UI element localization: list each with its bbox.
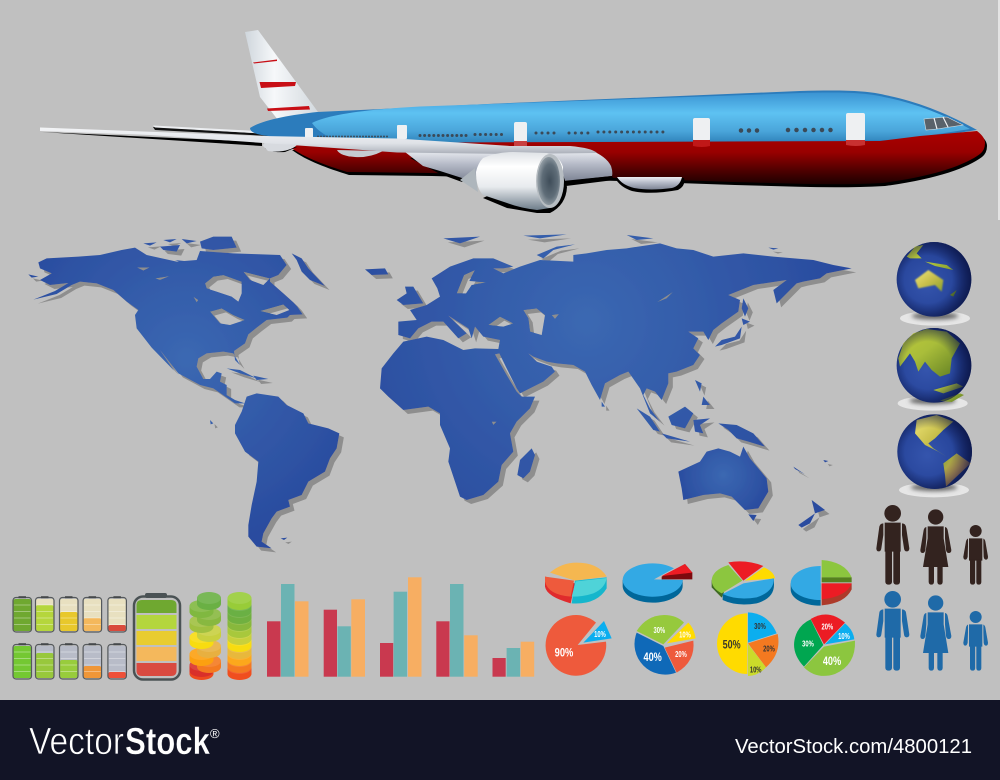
near wing <box>40 128 597 154</box>
fuselage blue base <box>250 90 977 150</box>
label 30 percent: 30% <box>653 625 666 635</box>
battery 40 percent <box>83 644 102 679</box>
main engine <box>460 152 567 213</box>
doors <box>305 113 865 147</box>
battery 20 percent <box>108 644 126 679</box>
islands <box>365 234 828 528</box>
footer logo: Vector <box>29 721 124 763</box>
globes <box>897 242 972 497</box>
footer logo <box>29 721 220 763</box>
icon: blue woman <box>920 595 951 671</box>
small batteries top row <box>13 597 126 632</box>
fuselage red belly <box>290 131 985 184</box>
label 10 percent: 10% <box>838 631 850 641</box>
footer image id: VectorStock.com/4800121 <box>735 736 972 758</box>
footer bar <box>0 700 1000 780</box>
second engine pod <box>615 177 684 193</box>
wing shadow <box>42 132 262 146</box>
bays and lakes of the Americas <box>138 268 289 325</box>
straight coin stack <box>228 592 252 680</box>
tail fin <box>245 30 318 120</box>
bar charts <box>267 577 534 677</box>
Europe Asia Africa and Oceania <box>365 234 852 528</box>
battery 40 percent <box>83 597 102 632</box>
cockpit windshield <box>924 117 963 130</box>
battery 60 percent <box>60 597 78 632</box>
pylon shadow <box>563 176 614 186</box>
battery 100 percent <box>13 644 32 679</box>
pie charts <box>545 560 855 676</box>
fuselage shadow <box>292 134 987 187</box>
label 50 percent: 50% <box>723 637 741 651</box>
people icons <box>876 505 988 671</box>
battery 100 percent <box>13 597 32 632</box>
South America <box>235 393 339 548</box>
bar group 1 <box>267 584 308 677</box>
label 90 percent: 90% <box>555 646 573 660</box>
globe: Australia view <box>897 242 971 326</box>
Americas <box>28 237 339 548</box>
Eurasia and Africa <box>380 243 852 500</box>
large battery <box>134 593 180 680</box>
3D pie orange red cyan <box>545 563 607 603</box>
flat pie 40 30 20 10 percent <box>635 615 696 675</box>
flat pie 90 and 10 percent <box>546 615 612 676</box>
under-wing fairing <box>405 150 612 181</box>
continents with drop shadow <box>28 234 852 548</box>
small batteries bottom row <box>13 644 126 679</box>
icon: dark woman <box>920 509 951 585</box>
battery 60 percent <box>60 644 78 679</box>
3D pie half blue <box>791 560 852 606</box>
icon: blue child <box>963 611 988 671</box>
battery 80 percent <box>36 597 54 632</box>
Greenland strip and Arctic islands <box>28 237 325 540</box>
label 40 percent: 40% <box>643 650 662 664</box>
label 20 percent: 20% <box>675 649 687 659</box>
right edge strip <box>998 0 1000 220</box>
label 20 percent: 20% <box>821 621 834 631</box>
label 20 percent: 20% <box>763 644 775 654</box>
label 10 percent: 10% <box>750 664 762 674</box>
airplane <box>40 30 987 213</box>
wing flap bubble <box>337 150 383 157</box>
North America <box>33 248 303 403</box>
label 40 percent: 40% <box>823 654 841 668</box>
label 30 percent: 30% <box>802 638 814 648</box>
under-wing fairing shadow <box>410 152 480 182</box>
label 10 percent: 10% <box>594 629 606 639</box>
label 30 percent: 30% <box>754 621 766 631</box>
flat pie 40 30 20 10 percent green <box>794 614 855 676</box>
bar group 5 <box>492 642 534 677</box>
3D pie blue with red slice <box>623 563 692 603</box>
inland seas of Eurasia <box>457 270 678 429</box>
passenger windows <box>318 130 831 136</box>
footer logo: ® <box>210 726 220 741</box>
icon: dark man <box>876 505 909 585</box>
icon: dark child <box>963 525 988 585</box>
battery 20 percent <box>108 597 126 632</box>
bar group 3 <box>380 577 422 677</box>
label 10 percent: 10% <box>679 629 691 639</box>
fuselage light blue panel <box>312 92 970 144</box>
footer logo: Stock <box>125 721 211 763</box>
Australia <box>678 447 768 510</box>
bar group 4 <box>436 584 478 677</box>
far wing <box>153 126 287 137</box>
rear fairing <box>263 142 297 152</box>
scattered coin stack <box>190 592 221 680</box>
globe: Asia view <box>897 328 971 411</box>
world map <box>28 234 852 548</box>
flat pie 50 30 20 10 percent <box>717 612 778 676</box>
globe: Americas view <box>897 414 972 497</box>
battery 80 percent <box>36 644 54 679</box>
icon: blue man <box>876 591 909 671</box>
3D pie four slices <box>712 561 775 604</box>
bar group 2 <box>324 599 365 677</box>
